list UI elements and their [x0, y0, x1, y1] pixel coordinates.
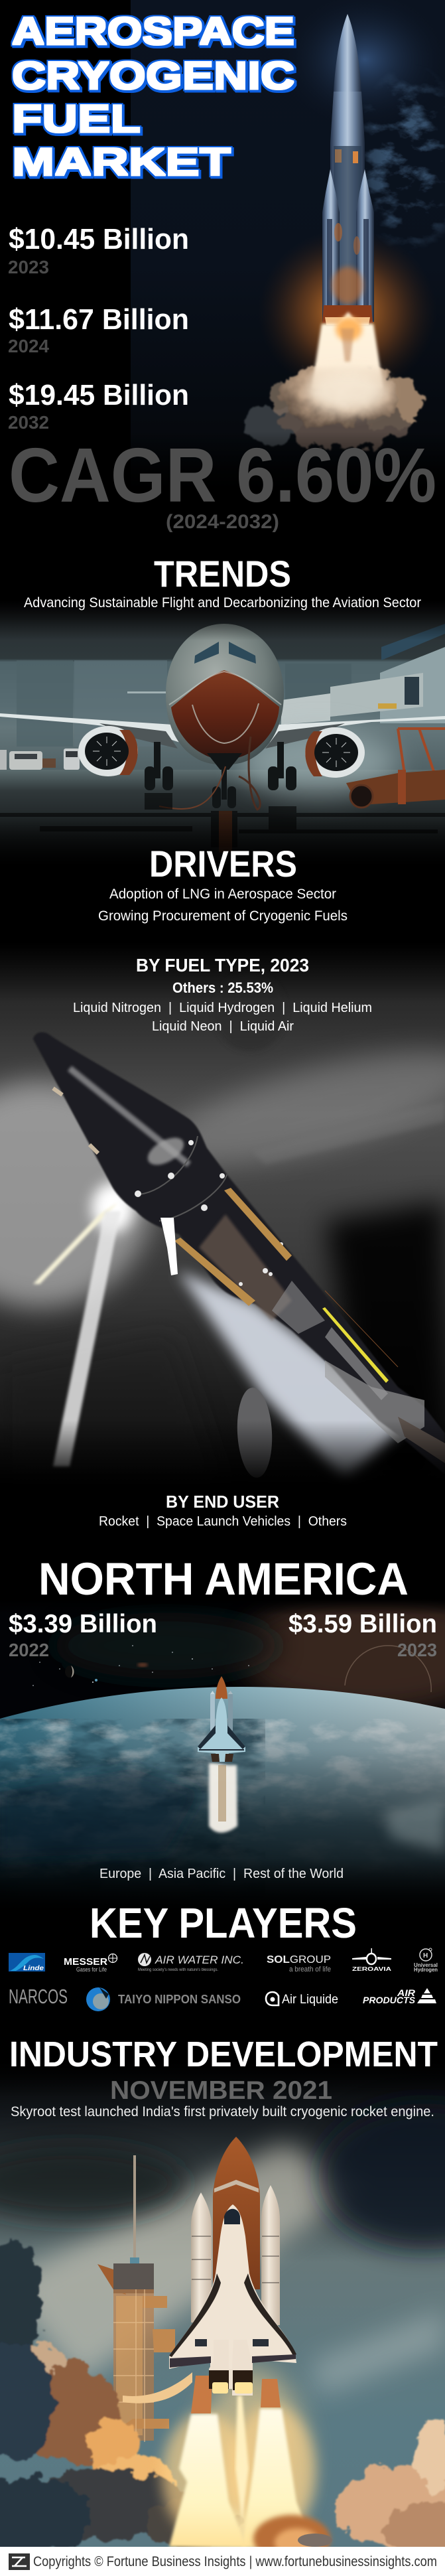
heading: trends: TRENDS: [154, 553, 291, 595]
text: other regions: Europe | Asia Pacific | Rest of the World: [99, 1867, 344, 1881]
stat 2032: [8, 379, 189, 433]
rocket flames: [308, 312, 387, 413]
stat: 2023: [288, 1610, 437, 1660]
logo: SOL Group: [267, 1954, 331, 1973]
logo: Taiyo Nippon Sanso: [86, 1987, 241, 2011]
section: north america: [9, 1553, 437, 1881]
logo: Air Products: PRODUCTS: [363, 1995, 416, 2005]
stat 2023: $10.45 Billion: [9, 223, 189, 255]
stat: CAGR: (2024-2032): [166, 511, 279, 533]
jet bridge: [281, 624, 445, 725]
stat: 2023: 2023: [397, 1640, 437, 1660]
left engine: [78, 726, 138, 776]
panel: shuttle launch image: [0, 2057, 445, 2563]
logo: Universal Hydrogen: Hydrogen: [414, 1967, 438, 1973]
logo: Air Water: AIR WATER INC.: [155, 1954, 244, 1966]
stat 2032: 2032: [8, 412, 49, 433]
orange ground cart: [346, 729, 445, 808]
text: driver two: Growing Procurement of Cryogenic Fuels: [98, 908, 348, 924]
stat 2023: [8, 223, 189, 277]
stars: [32, 1645, 249, 1686]
radome: [171, 670, 279, 760]
heading: north america: NORTH AMERICA: [38, 1553, 409, 1605]
heading: drivers: DRIVERS: [149, 843, 297, 885]
panel: trends airplane image: [0, 601, 445, 866]
ground reflections: [0, 793, 445, 837]
logo: Taiyo Nippon Sanso: TAIYO NIPPON SANSO: [118, 1993, 241, 2006]
text: trend description: Advancing Sustainable Flight and Decarbonizing the Aviation Sector: [24, 595, 421, 610]
text: development description: Skyroot test launched India's first privately built cryogenic rocket engine.: [11, 2104, 434, 2119]
logo: Air Products: AIR: [397, 1987, 416, 1998]
logo: ZeroAvia: [352, 1948, 391, 1972]
section: by end user: [99, 1492, 347, 1529]
logo: Universal Hydrogen: H: [423, 1952, 428, 1960]
exhaust plume: [178, 1271, 411, 1480]
logo: Linde: [9, 1953, 45, 1972]
heading: main title: MARKET: [12, 141, 231, 184]
main engines: [209, 2340, 232, 2389]
logo: Messer: [64, 1954, 117, 1973]
heading: by fuel type: BY FUEL TYPE, 2023: [136, 955, 309, 975]
heading: main title: [12, 10, 294, 184]
stat 2032: $19.45 Billion: [9, 379, 189, 411]
logo: Air Water: [138, 1953, 244, 1972]
footer: [0, 2547, 445, 2576]
logo: ZeroAvia: ZEROAVIA: [352, 1966, 391, 1972]
icon: space shuttle: [198, 1676, 245, 1833]
logo: Messer: MESSER: [64, 1956, 107, 1968]
parked vehicles: [0, 749, 80, 770]
icon: big shuttle: [169, 2137, 296, 2413]
heading: main title: FUEL: [12, 98, 141, 141]
rocket body: [33, 1033, 445, 1474]
logo: Messer: Gases for Life: [76, 1966, 107, 1973]
section: by fuel type: [73, 955, 372, 1034]
orbiter: [169, 2204, 296, 2389]
text: date: NOVEMBER 2021: [110, 2076, 332, 2105]
stat: 2022: 2022: [9, 1640, 49, 1660]
light flare: [33, 1182, 134, 1467]
icon: moon: [65, 1666, 74, 1678]
landing gear: [145, 737, 296, 810]
logo: Linde: Linde: [23, 1965, 44, 1972]
section: trends: [24, 553, 421, 610]
heading: main title: CRYOGENIC: [12, 54, 294, 98]
key players logos: [9, 1948, 438, 2011]
logo: Air Products: [363, 1987, 436, 2005]
text: fuel types line one: Liquid Nitrogen | Liquid Hydrogen | Liquid Helium: [73, 1001, 372, 1015]
panel: hero rocket illustration: [131, 0, 445, 453]
left booster: [191, 2192, 212, 2323]
logo: Universal Hydrogen: Universal: [414, 1962, 438, 1968]
icon: main rocket: [322, 14, 374, 325]
text: others share: Others : 25.53%: [172, 979, 273, 996]
right engine: [305, 727, 365, 778]
heading: main title: AEROSPACE: [12, 10, 294, 53]
left clouds: [0, 2240, 239, 2555]
stat 2024: $11.67 Billion: [9, 303, 189, 336]
icon: Fortune Business Insights logo: [9, 2553, 30, 2570]
smoke cloud: [243, 363, 421, 449]
panel: earth and shuttle image: [0, 1603, 445, 1891]
stats: market values: [8, 223, 189, 433]
stat: 2022: $3.39 Billion: [9, 1610, 157, 1638]
booster nozzles: [191, 2376, 212, 2413]
logo: Narcos: NARCOS: [9, 1985, 68, 2008]
right clouds: [335, 2419, 445, 2555]
logo: Air Water: Meeting society's needs with nature's blessings.: [138, 1968, 218, 1972]
right booster: [261, 2185, 280, 2325]
stat 2024: 2024: [8, 336, 49, 356]
logo: SOL Group: SOLGROUP: [267, 1954, 331, 1966]
section: industry development: [9, 2035, 438, 2119]
booster flames: [162, 2396, 332, 2563]
planet: [0, 1645, 445, 1886]
text: driver one: Adoption of LNG in Aerospace Sector: [109, 887, 336, 902]
logo: Air Liquide: Air Liquide: [282, 1993, 338, 2007]
logo: Universal Hydrogen: [414, 1948, 438, 1973]
oval hatch: [237, 1388, 272, 1478]
heading: by end user: BY END USER: [166, 1492, 279, 1512]
launch tower: [97, 2155, 192, 2442]
logo: SOL Group: a breath of life: [289, 1966, 331, 1973]
text: fuel types line two: Liquid Neon | Liquid Air: [152, 1019, 294, 1034]
wings: [0, 713, 445, 749]
section: drivers: [98, 843, 348, 924]
panel: cryogenic rocket image: [0, 942, 445, 1513]
external tank: [213, 2137, 260, 2289]
heading: key players: KEY PLAYERS: [90, 1899, 357, 1947]
text: end user list: Rocket | Space Launch Vehicles | Others: [99, 1514, 347, 1529]
stat: 2022: [9, 1610, 157, 1660]
fuselage: [166, 624, 284, 764]
stat 2024: [8, 303, 189, 356]
stat 2023: 2023: [8, 257, 49, 277]
stat: 2023: $3.59 Billion: [288, 1610, 437, 1638]
